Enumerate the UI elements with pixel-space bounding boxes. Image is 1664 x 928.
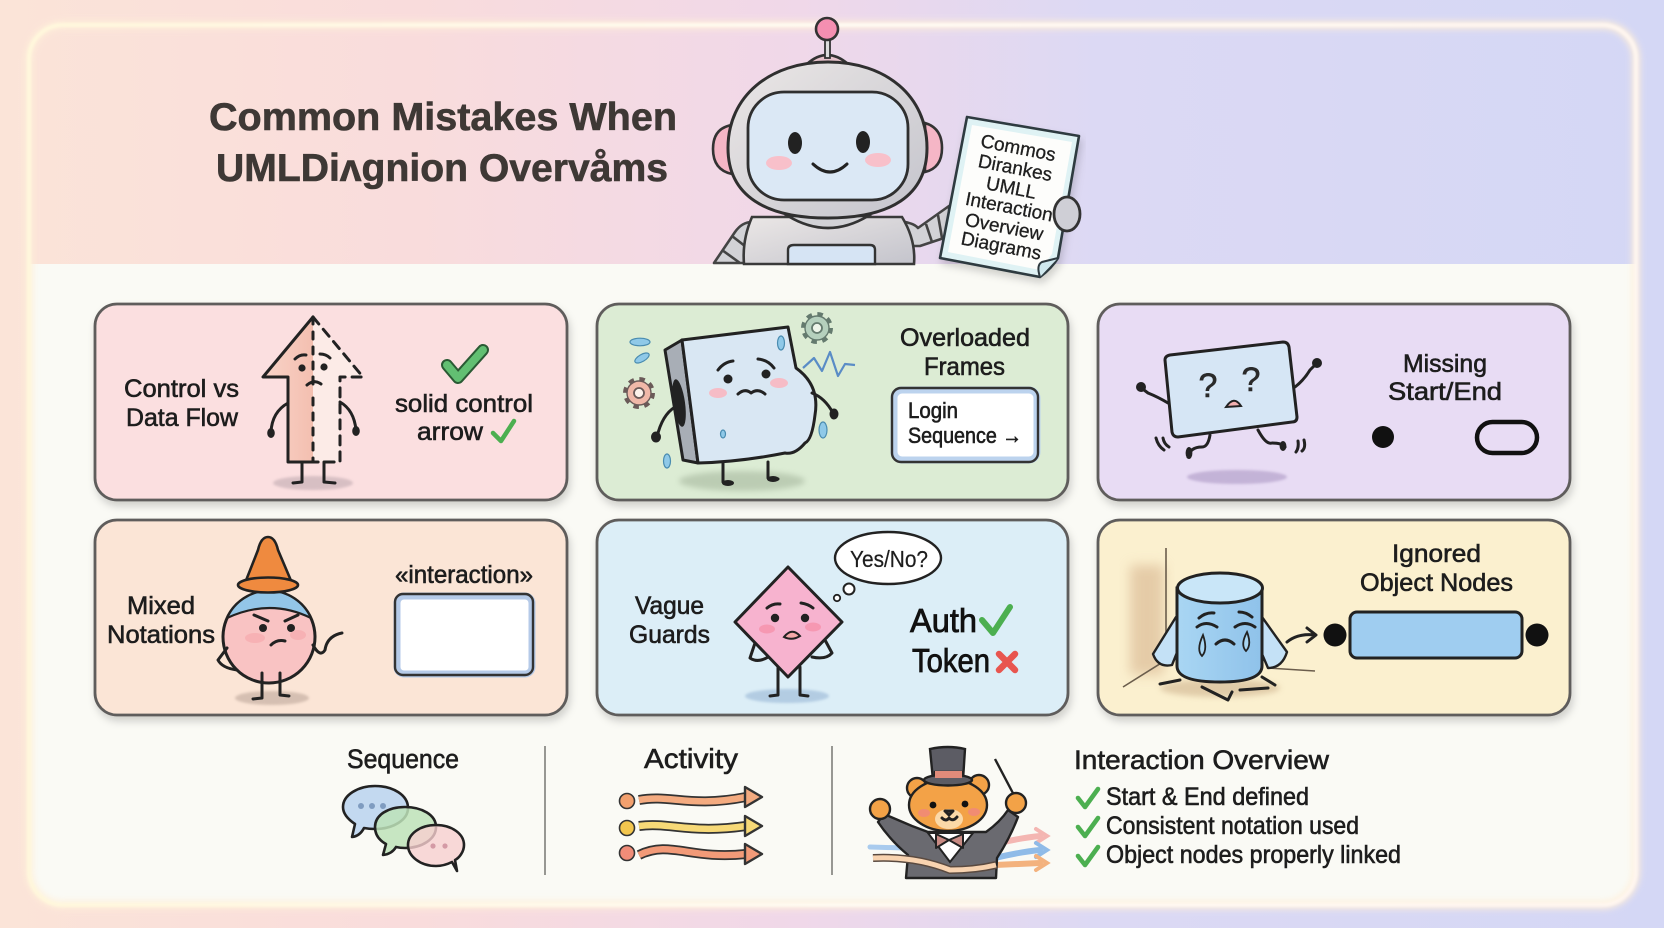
heading: ignored object nodes: Ignored [1392,540,1481,568]
heading: mixed notations [107,592,215,649]
login sequence frame: Login [908,398,958,423]
heading: missing start/end: Missing [1403,350,1487,378]
checklist items: Object nodes properly linked [1106,841,1401,869]
heading: vague guards: Vague [635,592,704,620]
icon: yellow flow arrow [620,816,762,836]
bear hands [870,793,1026,819]
flow ribbons [870,829,1047,870]
icon: green gear [804,315,830,341]
heading: overloaded frames [900,324,1030,381]
top hat [924,747,972,786]
note text: Diagrams [959,229,1043,265]
overloaded block character [651,327,838,491]
lower content panel [30,264,1636,905]
robot screen [748,92,908,200]
correct label: arrow [417,418,484,446]
correct label [395,390,533,446]
heading: overloaded frames: Overloaded [900,324,1030,352]
tan ribbon [873,858,996,870]
crying cylinder character [1153,573,1287,700]
final node pill [1477,422,1537,453]
heading: mixed notations: Mixed [127,592,195,620]
heading: control vs data flow: Data Flow [126,404,239,432]
note text: Interaction [963,189,1055,226]
column: interaction overview checklist [1074,745,1401,869]
heading: vague guards: Guards [629,621,710,649]
heading: missing start/end: Start/End [1388,378,1502,406]
heading: ignored object nodes: Object Nodes [1360,569,1513,597]
robot body [744,217,914,264]
icon: overlapping speech bubbles [343,786,464,871]
panel: overloaded frames [597,304,1068,500]
login sequence frame [892,388,1038,462]
guard examples [910,602,990,679]
bear ears [907,775,989,798]
correct label: solid control [395,390,533,418]
blank frame [395,594,533,675]
panel: mixed notations [95,520,567,715]
jumping frame character: ? [1242,361,1260,399]
heading: interaction overview: Interaction Overview [1074,745,1330,775]
checklist items: Consistent notation used [1106,812,1359,840]
panel: vague guards [597,520,1068,715]
heading: missing start/end [1388,350,1502,406]
suit and arms [878,810,1018,878]
robot antenna [807,18,848,64]
object node bar [1324,612,1548,658]
heading: overloaded frames: Frames [924,353,1005,381]
icon: orange flow arrow [620,787,762,808]
thought bubble: Yes/No? [850,546,928,572]
initial node [1372,426,1394,448]
icon: token cross [999,654,1015,670]
robot face [766,131,891,172]
note text: Commos [979,131,1057,166]
checklist items: Start & End defined [1106,783,1309,811]
column: activity [620,743,762,864]
arrow to object node [1287,628,1316,642]
icon: small check [493,421,514,441]
diamond character [735,567,842,703]
heading: vague guards [629,592,710,649]
guard examples: Auth [910,602,977,639]
panel: missing start and end [1098,304,1570,500]
robot hand [1054,197,1080,231]
jumping frame character: ? [1199,367,1217,405]
corner wall [1123,548,1315,687]
note text: Dirankes [976,151,1054,186]
robot ears [713,123,942,174]
note text: Overview [963,210,1045,246]
heading: ignored object nodes [1360,540,1513,597]
robot helmet [728,62,927,218]
bear head [909,779,987,831]
note paper [940,117,1079,277]
checklist items [1106,783,1401,869]
panel: ignored object nodes [1098,520,1570,715]
check icons [1078,789,1098,865]
login sequence frame: Sequence → [908,423,1022,448]
note text [959,131,1057,265]
heading: activity: Activity [644,743,738,774]
stereotype label: «interaction» [395,561,533,589]
column dividers [545,746,832,875]
robot arm left [714,222,755,263]
bear face [918,801,980,829]
thought bubble [834,532,941,601]
baton [995,759,1015,797]
arrow character [263,317,363,490]
title: UMLDiʌgnion Overvåms [216,147,668,190]
heading: control vs data flow: Control vs [124,375,239,403]
shirt and bow tie [928,833,973,862]
panel: control vs data flow [95,304,567,500]
icon: green check [447,350,483,378]
column: sequence [343,744,464,871]
icon: pink gear [626,380,652,406]
icon: red flow arrow [620,844,762,864]
jumping frame character [1136,342,1322,484]
title [209,96,677,190]
heading: mixed notations: Notations [107,621,215,649]
robot chest panel [788,245,875,264]
icon: auth check [982,607,1010,633]
robot collar [788,216,868,228]
cone hat character [218,537,342,705]
robot arm right [905,206,950,246]
conductor bear illustration [870,747,1047,878]
guard examples: Token [912,642,990,679]
heading: sequence: Sequence [347,744,459,774]
heading: control vs data flow [124,375,239,432]
title: Common Mistakes When [209,96,677,139]
robot mascot holding note [713,18,1080,277]
stress squiggle [803,352,855,376]
note text: UMLL [984,173,1038,204]
sweat drops [630,336,827,468]
